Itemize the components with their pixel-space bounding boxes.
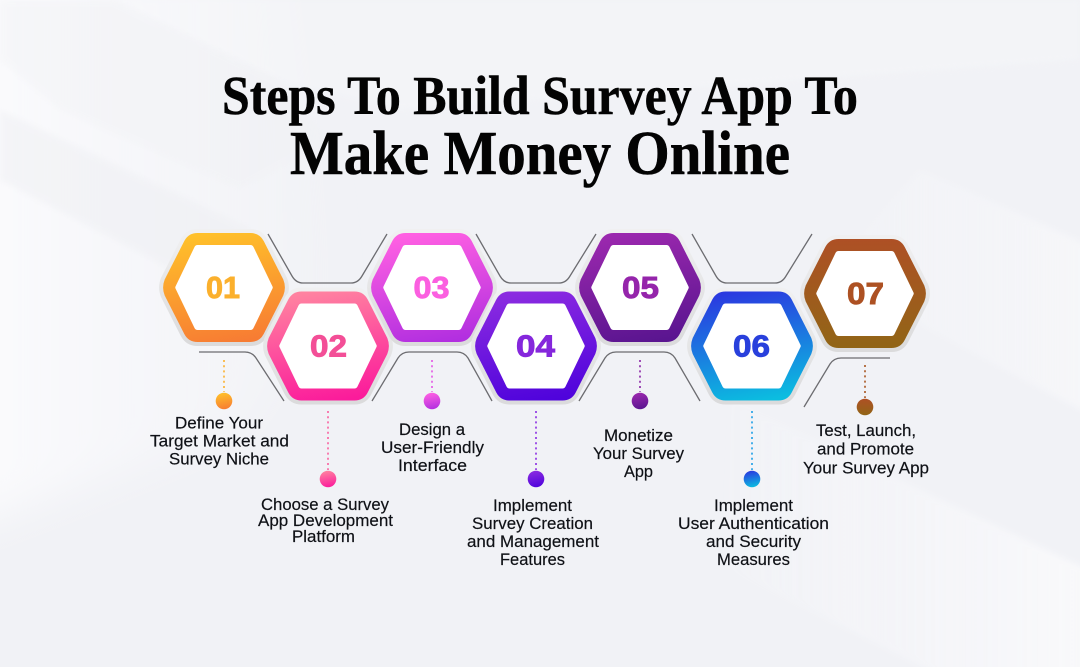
label 07: and Promote bbox=[817, 440, 914, 458]
step 05 bbox=[579, 233, 701, 481]
label 01: Survey Niche bbox=[169, 450, 269, 468]
label 07 bbox=[803, 422, 929, 478]
connector lines bbox=[199, 234, 890, 407]
label 06: Measures bbox=[717, 551, 790, 569]
label 07: Test, Launch, bbox=[816, 422, 916, 440]
label 03: Design a bbox=[399, 421, 466, 439]
hexagon 02 bbox=[267, 292, 389, 400]
stem and dot 06 bbox=[744, 411, 760, 487]
label 04 bbox=[467, 497, 599, 569]
title line 1: Steps To Build Survey App To bbox=[222, 65, 858, 126]
step 07 bbox=[803, 239, 929, 478]
hexagon 07 bbox=[804, 239, 926, 348]
hexagon 05 bbox=[579, 233, 701, 342]
label 01: Define Your bbox=[175, 414, 264, 432]
label 06 bbox=[678, 497, 829, 569]
label 06: and Security bbox=[706, 533, 802, 551]
label 06: User Authentication bbox=[678, 515, 829, 533]
label 06: Implement bbox=[714, 497, 793, 515]
title bbox=[222, 65, 858, 188]
label 03 bbox=[381, 421, 485, 475]
label 04: and Management bbox=[467, 533, 599, 551]
label 04: Features bbox=[500, 551, 565, 569]
label 02: App Development bbox=[258, 512, 393, 530]
label 01: Target Market and bbox=[150, 432, 289, 450]
label 04: Survey Creation bbox=[472, 515, 593, 533]
stem and dot 04 bbox=[528, 411, 544, 487]
number 05: 05 bbox=[622, 270, 659, 305]
label 02: Choose a Survey bbox=[261, 496, 390, 514]
number 03: 03 bbox=[414, 270, 450, 305]
number 07: 07 bbox=[847, 276, 884, 311]
hexagon 01 bbox=[163, 233, 285, 342]
title line 2: Make Money Online bbox=[290, 120, 790, 188]
label 04: Implement bbox=[493, 497, 572, 515]
number 06: 06 bbox=[733, 328, 770, 364]
hexagon 06 bbox=[691, 292, 813, 400]
label 07: Your Survey App bbox=[803, 460, 929, 478]
stem and dot 02 bbox=[320, 411, 336, 487]
number 04: 04 bbox=[516, 328, 556, 364]
label 03: User-Friendly bbox=[381, 439, 485, 457]
number 01: 01 bbox=[206, 270, 240, 305]
stem and dot 03 bbox=[424, 360, 440, 409]
label 02: Platform bbox=[292, 528, 355, 546]
label 05 bbox=[593, 427, 685, 481]
label 05: Monetize bbox=[604, 427, 673, 445]
label 01 bbox=[150, 414, 289, 468]
hexagon 04 bbox=[475, 292, 597, 400]
label 03: Interface bbox=[398, 457, 467, 475]
stem and dot 07 bbox=[857, 365, 873, 415]
label 05: App bbox=[624, 463, 653, 481]
label 05: Your Survey bbox=[593, 445, 685, 463]
label 02 bbox=[258, 496, 393, 546]
hexagon 03 bbox=[371, 233, 493, 342]
step 04 bbox=[467, 292, 599, 569]
step 01 bbox=[150, 233, 289, 468]
step 02 bbox=[258, 292, 393, 546]
stem and dot 01 bbox=[216, 360, 232, 409]
step 06 bbox=[678, 292, 829, 569]
stem and dot 05 bbox=[632, 360, 648, 409]
step 03 bbox=[371, 233, 493, 475]
number 02: 02 bbox=[310, 328, 347, 364]
